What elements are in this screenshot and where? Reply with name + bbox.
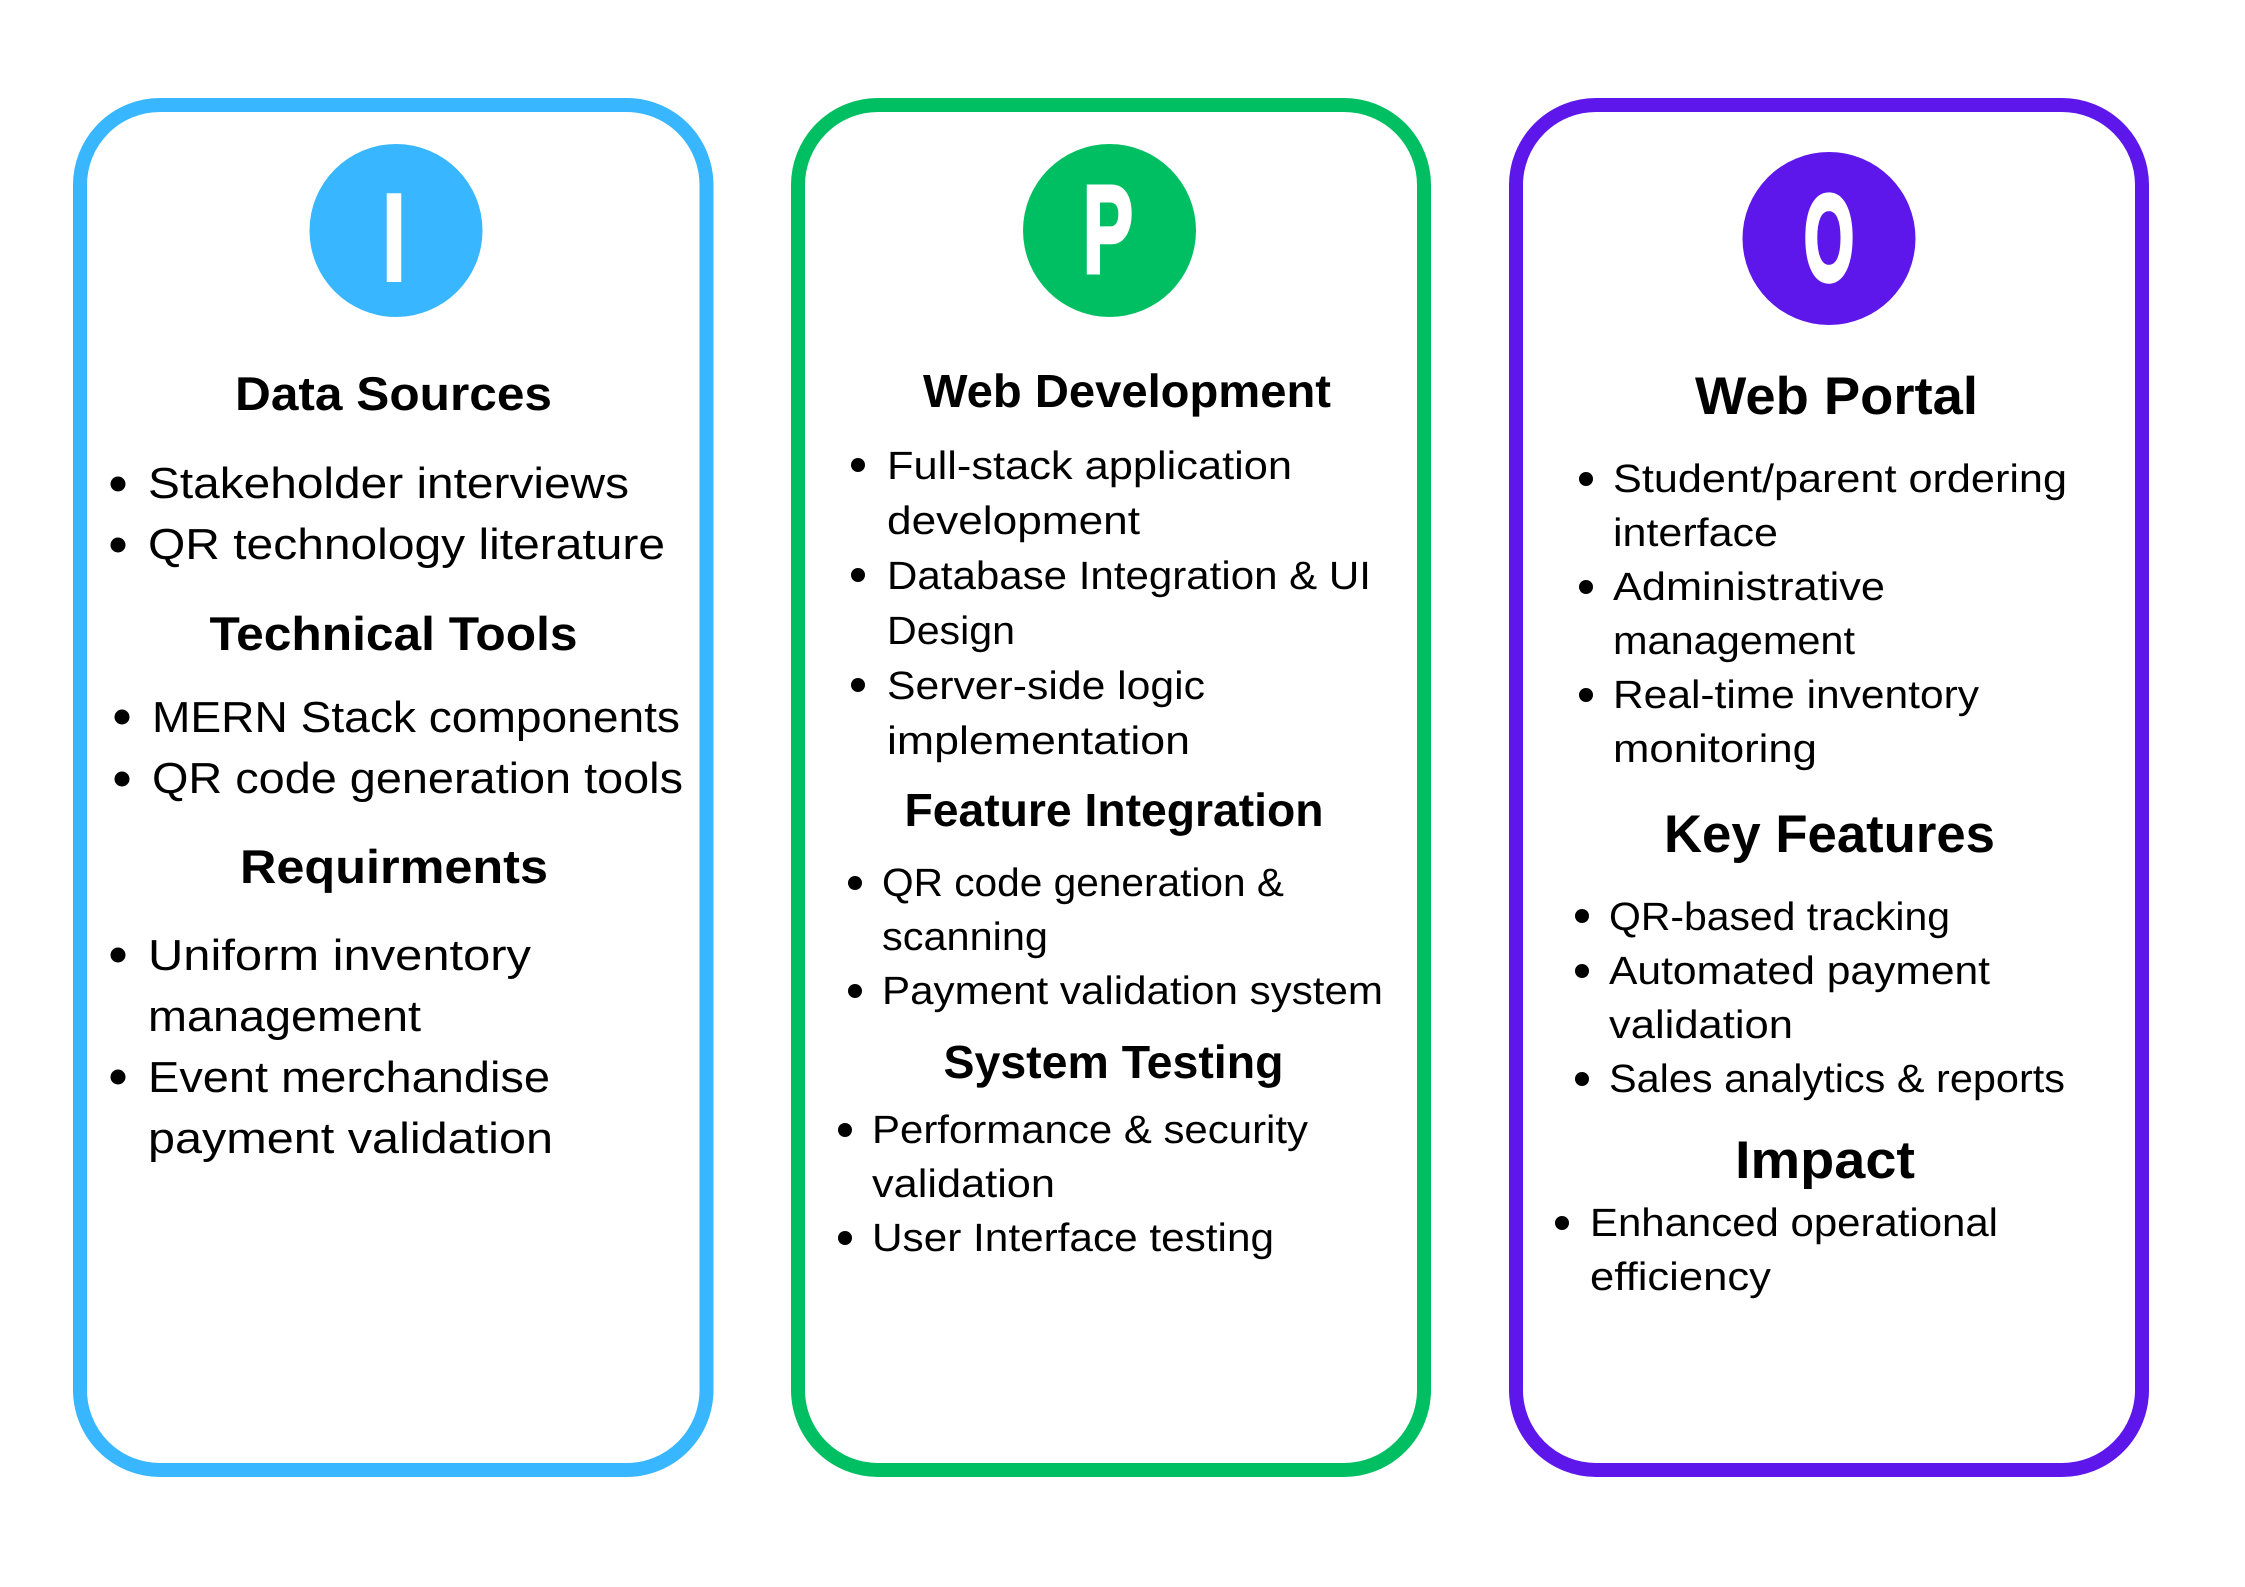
list: requirements: payment validation [148,1115,553,1163]
list: web portal: management [1613,619,1855,663]
input card border [80,105,706,1470]
heading: Technical Tools: Technical Tools [210,608,578,661]
list: impact: efficiency [1590,1255,1771,1299]
heading: Web Development: Web Development [923,365,1331,417]
heading: Key Features: Key Features [1664,805,1995,864]
list: requirements: Event merchandise [148,1054,550,1102]
list: feature integration: QR code generation & [882,861,1284,905]
list: web development: Full-stack application [887,444,1292,488]
output card border [1516,105,2142,1470]
heading: Impact: Impact [1735,1131,1915,1190]
list: technical tools: MERN Stack components [152,694,680,742]
list: web portal: interface [1613,511,1778,555]
list: impact [1555,1201,1998,1299]
list: feature integration [848,861,1383,1013]
list: system testing: validation [872,1162,1055,1206]
list: technical tools: QR code generation tools [152,755,683,803]
list: data sources: Stakeholder interviews [148,460,629,508]
list: key features: Automated payment [1609,949,1990,993]
list: web development: Design [887,609,1015,653]
panel: input [80,105,706,1470]
list: requirements: management [148,993,421,1041]
list: web portal: Real-time inventory [1613,673,1979,717]
list: requirements: Uniform inventory [148,932,531,980]
list: technical tools [114,694,683,803]
list: web development: implementation [887,719,1190,763]
list: web portal: Administrative [1613,565,1885,609]
list: key features: Sales analytics & reports [1609,1057,2065,1101]
icon: letter P badge: P [1083,160,1133,300]
process card border [798,105,1424,1470]
list: feature integration: Payment validation system [882,969,1383,1013]
list: system testing: User Interface testing [872,1216,1274,1260]
panel: process [798,105,1424,1470]
list: requirements [110,932,553,1163]
icon: letter O badge: O [1804,170,1854,306]
list: web development: development [887,499,1140,543]
list: impact: Enhanced operational [1590,1201,1998,1245]
icon: letter P badge [1023,144,1196,317]
list: web development: Database Integration & UI [887,554,1371,598]
heading: Data Sources: Data Sources [235,368,552,421]
icon: letter O badge [1742,152,1916,325]
list: web portal: Student/parent ordering [1613,457,2067,501]
panel: output [1516,105,2142,1470]
list: system testing: Performance & security [872,1108,1308,1152]
heading: Feature Integration: Feature Integration [904,784,1324,836]
list: web development [851,444,1371,763]
list: data sources [110,460,665,569]
list: web portal: monitoring [1613,727,1817,771]
list: key features: validation [1609,1003,1793,1047]
list: web development: Server-side logic [887,664,1205,708]
icon: letter I badge: I [380,166,408,310]
list: key features [1575,895,2065,1101]
list: system testing [838,1108,1308,1260]
list: feature integration: scanning [882,915,1048,959]
heading: Requirments: Requirments [240,841,548,894]
heading: System Testing: System Testing [944,1036,1284,1088]
list: data sources: QR technology literature [148,521,665,569]
heading: Web Portal: Web Portal [1695,367,1978,426]
icon: letter I badge [310,144,482,317]
list: web portal [1579,457,2067,771]
list: key features: QR-based tracking [1609,895,1950,939]
